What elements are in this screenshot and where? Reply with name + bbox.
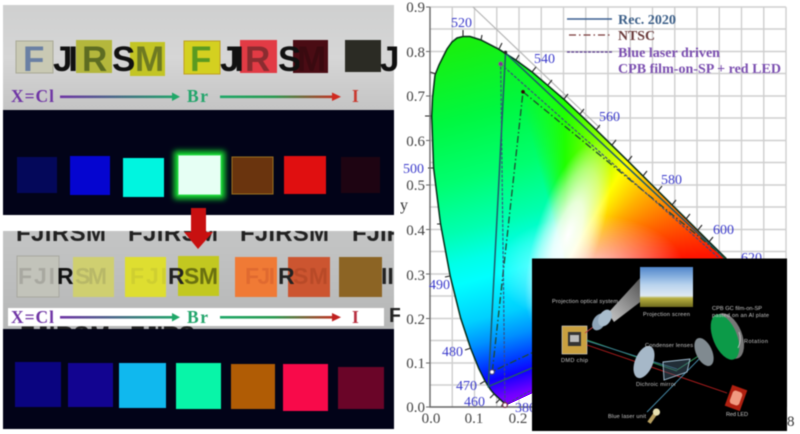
icon: condenser lens left bbox=[629, 343, 659, 381]
photo: films under daylight, top: F bbox=[190, 40, 211, 79]
photo: films under daylight, top: M bbox=[297, 40, 326, 79]
chart: wavelength labels: 520 bbox=[451, 16, 472, 31]
icon: red LED bbox=[725, 385, 747, 411]
chart: axes: 0.2 bbox=[406, 312, 425, 328]
chart: wavelength labels: 470 bbox=[456, 379, 477, 394]
chart: axes: 0.8 bbox=[406, 45, 425, 61]
label: halide series X=Cl to I, bottom: Br bbox=[187, 307, 208, 327]
icon: condenser lens right bbox=[690, 335, 718, 369]
photo: films under daylight, bottom: FJIRSM bbox=[20, 322, 110, 349]
photo: films under daylight, top: M bbox=[135, 40, 164, 79]
icon: optical beams bbox=[585, 322, 727, 412]
photo: films under daylight, top: JI bbox=[220, 40, 244, 79]
chart: axes: 0.0 bbox=[406, 400, 425, 416]
chart: axes: 0.3 bbox=[406, 268, 425, 284]
chart: primary markers bbox=[490, 51, 525, 407]
photo: films under daylight, bottom bbox=[3, 220, 440, 349]
inset labels: Projection optical system bbox=[552, 299, 618, 305]
chart: wavelength labels: 460 bbox=[464, 395, 485, 410]
photo: films under UV, bottom bbox=[3, 329, 394, 429]
chart: wavelength labels: 580 bbox=[661, 173, 682, 188]
label: halide series X=Cl to I, bottom: X=Cl bbox=[11, 307, 54, 327]
chart: wavelength labels: 600 bbox=[713, 223, 734, 238]
legend: CPB film-on-SP + red LED bbox=[618, 62, 781, 77]
photo: films under daylight, top: J bbox=[380, 40, 399, 79]
chart: wavelength labels: 380 bbox=[515, 401, 536, 416]
chart: blue laser driven triangle bbox=[501, 64, 737, 405]
inset labels: Projection screen bbox=[643, 312, 690, 318]
chart: axes: 0.7 bbox=[406, 89, 426, 105]
chart: wavelength labels bbox=[403, 16, 762, 416]
legend: Rec. 2020 bbox=[618, 13, 676, 28]
chart: wavelength labels: 500 bbox=[403, 162, 424, 177]
chart: wavelength labels: 480 bbox=[442, 345, 463, 360]
chart: wavelength labels: 490 bbox=[429, 278, 450, 293]
photo: films under daylight, bottom: SM bbox=[184, 263, 218, 289]
photo: films under daylight, bottom: R bbox=[168, 263, 185, 289]
inset labels: Rotation bbox=[744, 339, 768, 345]
photo: films under daylight, bottom: FJI bbox=[130, 263, 167, 289]
panel: CIE chromaticity chart bbox=[400, 0, 795, 432]
chart: axes: 0.2 bbox=[509, 411, 527, 427]
photo: films under UV, top bbox=[3, 110, 394, 215]
chart: axes: 0.9 bbox=[406, 0, 425, 16]
chart: axes: 0.6 bbox=[406, 134, 426, 150]
photo: films under daylight, bottom: SM bbox=[75, 263, 107, 289]
label: halide series X=Cl to I, top: X=Cl bbox=[11, 86, 54, 106]
photo: films under daylight, top: R bbox=[245, 40, 270, 79]
icon: projection screen bbox=[640, 267, 693, 307]
photo: films under daylight, top bbox=[3, 5, 399, 110]
label: halide series X=Cl to I, bottom: I bbox=[352, 307, 359, 327]
label: halide series X=Cl to I, top bbox=[11, 86, 359, 106]
inset labels: Red LED bbox=[726, 412, 748, 418]
photo: films under daylight, bottom: SM bbox=[293, 263, 328, 289]
chart: NTSC triangle bbox=[492, 92, 728, 372]
photo: films under daylight, top: JI bbox=[53, 40, 78, 79]
chart: wavelength labels: 620 bbox=[741, 251, 762, 266]
inset labels: Blue laser unit bbox=[608, 414, 646, 420]
photo: films under daylight, top: F bbox=[23, 40, 44, 79]
chart: chromaticity colour gamut fill bbox=[432, 36, 726, 405]
label: halide series X=Cl to I, top: Br bbox=[187, 86, 208, 106]
chart: axes: 0.1 bbox=[406, 356, 425, 372]
photo: films under daylight, top: S bbox=[112, 40, 135, 79]
photo: films under daylight, bottom: R bbox=[57, 263, 74, 289]
chart: axes: y bbox=[400, 197, 408, 214]
inset labels: Dichroic mirror bbox=[636, 382, 676, 388]
inset labels: DMD chip bbox=[561, 358, 588, 364]
chart: axes bbox=[400, 0, 786, 427]
photo: films under daylight, bottom: II bbox=[381, 263, 394, 289]
chart: Rec. 2020 triangle bbox=[488, 53, 745, 387]
icon: projection beam bbox=[608, 277, 648, 322]
legend: NTSC bbox=[618, 29, 655, 44]
inset labels: Condenser lenses bbox=[645, 343, 693, 349]
photo: films under daylight, bottom: FJI bbox=[245, 263, 275, 289]
panel: photographs of halide films bbox=[2, 4, 401, 430]
photo: films under daylight, bottom: FJI bbox=[18, 263, 55, 289]
chart: wavelength labels: 540 bbox=[534, 52, 555, 67]
legend bbox=[567, 13, 781, 77]
chart: wavelength labels: 560 bbox=[599, 110, 620, 125]
icon: dichroic mirror bbox=[663, 359, 690, 380]
chart: axes: 0.0 bbox=[422, 411, 440, 427]
inset: projector optical schematic bbox=[532, 258, 787, 431]
legend: Blue laser driven bbox=[618, 46, 720, 61]
icon: phosphor wheel bbox=[705, 309, 750, 364]
chart: spectral locus outline with ticks bbox=[425, 30, 726, 407]
photo: films under daylight, bottom: R bbox=[278, 263, 295, 289]
photo: films under daylight, bottom: FJIRSM bbox=[240, 220, 329, 247]
chart: axes: 0.5 bbox=[406, 178, 425, 194]
inset labels bbox=[552, 299, 769, 420]
icon: DMD chip bbox=[562, 326, 587, 354]
chart: axes: 0.1 bbox=[465, 411, 483, 427]
icon: projection lens bbox=[589, 307, 615, 333]
chart: axes: 0.4 bbox=[406, 223, 426, 239]
label: halide series X=Cl to I, top: I bbox=[352, 86, 359, 106]
inset labels: pasted on an Al plate bbox=[712, 313, 769, 319]
arrow: red downward bbox=[184, 208, 213, 249]
photo: films under daylight, top: R bbox=[82, 40, 107, 79]
photo: films under daylight, top: S bbox=[278, 40, 301, 79]
inset labels: CPB GC film-on-SP bbox=[712, 306, 762, 312]
photo: films under daylight, bottom: FJIRSM bbox=[128, 220, 218, 247]
photo: films under daylight, bottom: FJIRSM bbox=[16, 220, 106, 247]
label: halide series X=Cl to I, bottom bbox=[8, 307, 384, 327]
photo: films under daylight, bottom: FJIRS bbox=[130, 322, 195, 349]
page number: 8 bbox=[787, 414, 794, 430]
icon: blue laser unit bbox=[646, 407, 661, 425]
